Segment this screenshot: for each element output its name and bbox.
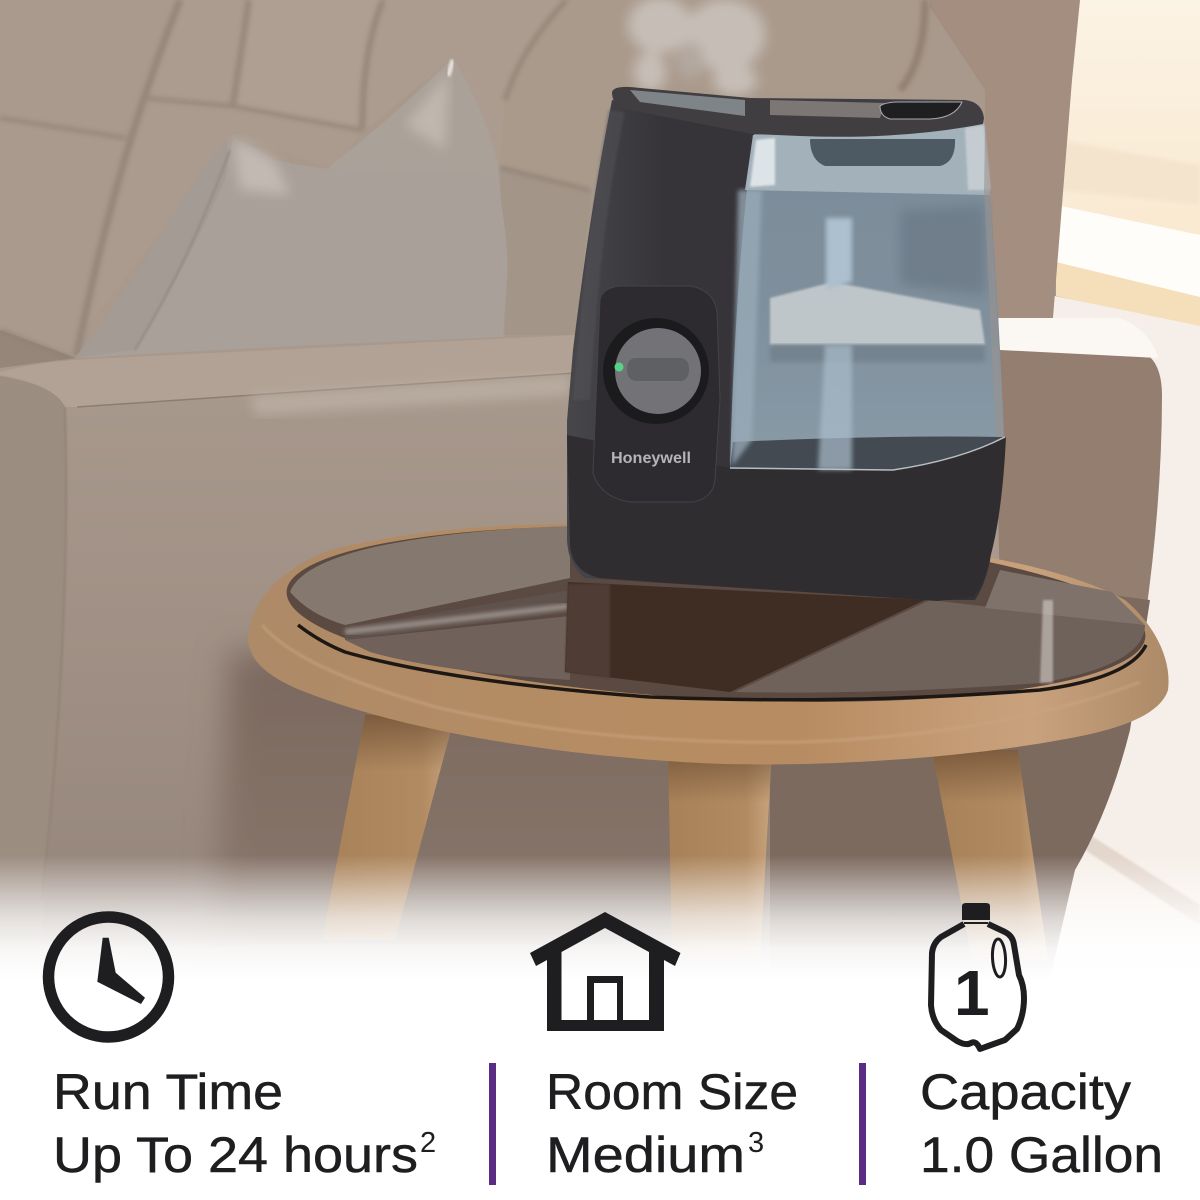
divider — [489, 1063, 496, 1185]
glass top — [282, 507, 1150, 721]
icon: clock — [48, 917, 168, 1037]
humidifier — [567, 87, 1006, 601]
window and wall — [1050, 0, 1200, 1000]
text: run time: Run Time — [53, 1064, 283, 1120]
tank — [730, 122, 1005, 470]
table — [248, 507, 1169, 960]
chair wing right — [925, 0, 1080, 330]
front pillow — [75, 137, 508, 358]
icon: gallon jug: 1 — [954, 957, 990, 1029]
lid — [612, 87, 984, 137]
table legs — [322, 715, 455, 940]
text: up to 24 hours: Up To 24 hours — [53, 1127, 418, 1183]
sofa back cushions — [0, 0, 930, 368]
icon: gallon jug — [931, 903, 1024, 1049]
sofa arm right — [995, 318, 1162, 620]
white fade — [0, 855, 1200, 980]
text: medium: 3 — [748, 1127, 764, 1159]
text: up to 24 hours: 2 — [420, 1127, 436, 1159]
icon: house — [530, 912, 680, 1031]
steam — [628, 0, 765, 96]
base — [567, 435, 1006, 601]
back pillow — [329, 58, 507, 260]
text: medium: Medium — [546, 1127, 745, 1183]
text: capacity: Capacity — [920, 1064, 1131, 1120]
text: 1.0 gallon: 1.0 Gallon — [920, 1127, 1163, 1183]
body left highlight — [573, 110, 625, 400]
dial — [603, 318, 709, 424]
divider — [859, 1063, 866, 1185]
brand logo: Honeywell — [611, 450, 691, 467]
cushion seams — [0, 0, 925, 358]
text: room size: Room Size — [546, 1064, 798, 1120]
body — [567, 100, 1005, 600]
control panel — [593, 286, 720, 502]
lower sofa behind table — [210, 650, 770, 1000]
table rim — [248, 524, 1169, 764]
sofa arm left — [0, 335, 575, 1000]
